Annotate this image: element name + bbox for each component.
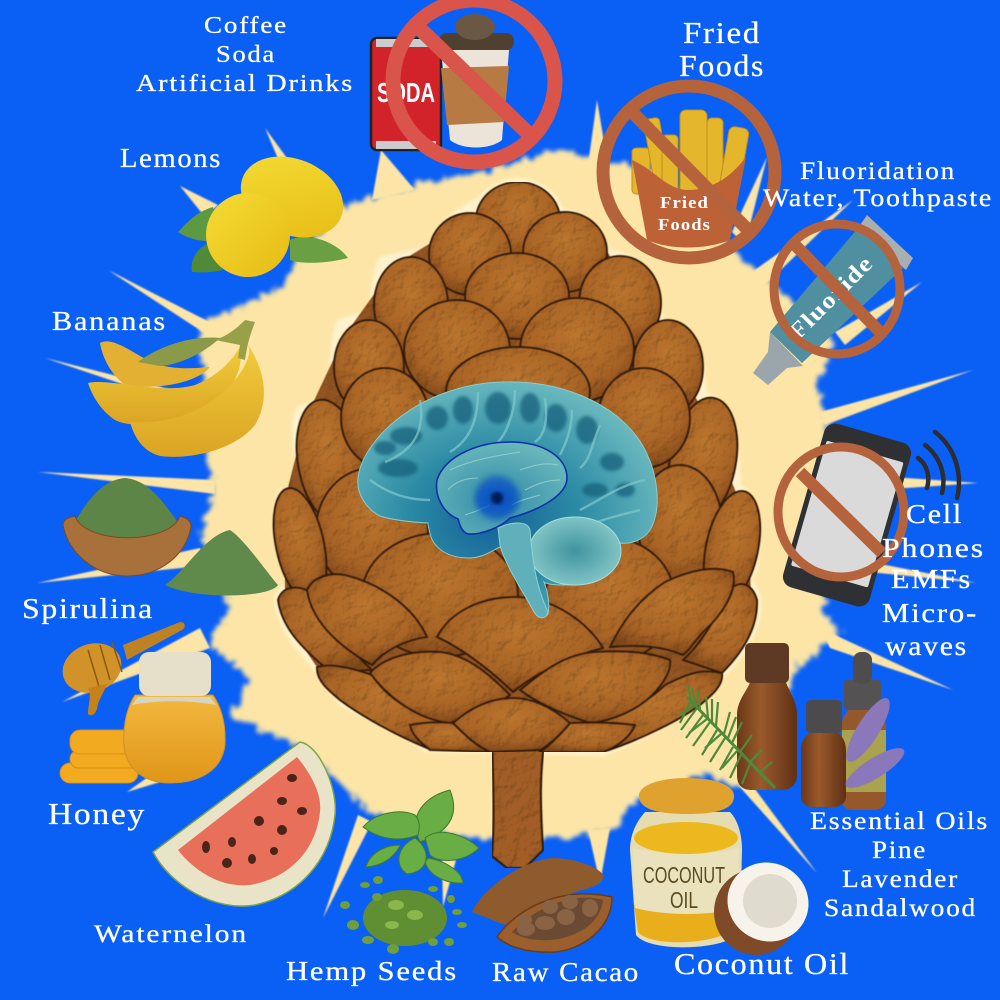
label: fluoridation <box>763 158 993 212</box>
label: fluoridation: Water, Toothpaste <box>763 185 993 212</box>
honey jar <box>124 652 225 783</box>
jar body <box>630 812 742 947</box>
jar lid <box>639 778 734 814</box>
sunburst <box>37 100 978 918</box>
icon: soda and coffee, crossed out <box>371 0 555 162</box>
pineal dark spot <box>475 476 519 520</box>
prohibition sign <box>778 447 904 577</box>
jar text: COCONUT <box>643 862 725 888</box>
icon: hemp leaves and seeds <box>340 790 479 954</box>
label: coconut oil: Coconut Oil <box>674 946 850 981</box>
cerebellum <box>529 517 621 585</box>
box label line 2: Foods <box>658 215 711 234</box>
icon: fried foods, crossed out <box>603 86 775 258</box>
back lemon <box>229 142 355 252</box>
phone screen <box>791 441 904 588</box>
label: fried foods: Fried <box>683 15 761 50</box>
icon: watermelon <box>153 742 335 906</box>
dropper collar <box>844 680 881 710</box>
label: essential oils: Sandalwood <box>824 895 977 922</box>
watermelon flesh <box>178 757 320 885</box>
brain folds <box>374 392 635 497</box>
pine sprig <box>679 685 775 788</box>
label: fried foods: Foods <box>679 48 765 83</box>
honey dipper <box>56 622 185 715</box>
label: bananas: Bananas <box>52 306 167 336</box>
brainstem <box>498 523 548 618</box>
label: lemons: Lemons <box>120 143 222 173</box>
cone halo <box>278 182 757 752</box>
dropper bulb <box>853 652 872 684</box>
large bottle <box>737 682 797 790</box>
icon: honey <box>56 622 225 783</box>
prohibition sign <box>393 0 555 162</box>
label: spirulina: Spirulina <box>22 593 154 625</box>
hemp seeds <box>340 876 467 954</box>
tube cap <box>753 332 803 385</box>
watermelon rind <box>153 742 335 906</box>
right bottle <box>842 708 886 810</box>
signal waves <box>918 432 959 498</box>
pine cone <box>264 182 769 868</box>
icon: lemons <box>178 142 355 277</box>
fries <box>632 110 750 200</box>
tube <box>770 228 903 363</box>
cacao beans <box>517 895 598 936</box>
bowl <box>63 516 191 576</box>
prohibition sign <box>603 86 775 258</box>
label: cell phones emfs microwaves: Phones <box>882 533 985 563</box>
right bottle label <box>842 730 886 792</box>
lemon leaves <box>178 207 220 241</box>
label: essential oils: Essential Oils <box>810 808 989 835</box>
banana leaf <box>138 337 220 366</box>
soda can: SODA <box>377 77 435 108</box>
brain gyri lines <box>370 390 645 525</box>
label: essential oils <box>810 808 989 922</box>
powder pile <box>165 530 278 596</box>
large bottle cap <box>745 643 789 683</box>
icon: bananas <box>88 320 264 457</box>
watermelon seeds <box>202 774 307 868</box>
jar oil bottom <box>634 905 738 942</box>
jar text line 2: OIL <box>670 887 698 913</box>
brain outline <box>358 382 657 617</box>
label: essential oils: Pine <box>872 837 927 864</box>
label: coffee soda artificial drinks: Artificial Drinks <box>136 71 354 97</box>
icon: essential oils <box>679 643 909 810</box>
tube crimp <box>858 215 913 270</box>
icon: spirulina bowl and powder <box>63 478 278 596</box>
icon: cell phone, crossed out <box>778 421 959 609</box>
phone body <box>780 421 914 609</box>
label: cell phones emfs microwaves <box>882 499 985 661</box>
tube label: Fluoride <box>784 250 878 345</box>
front lemon <box>206 193 290 277</box>
label: essential oils: Lavender <box>842 866 959 893</box>
label: fluoridation: Fluoridation <box>800 158 956 185</box>
icon: coconut oil jar <box>630 778 823 956</box>
jar label <box>633 848 739 914</box>
coconut half <box>713 848 823 956</box>
lavender <box>839 693 909 794</box>
label: cell phones emfs microwaves: Cell <box>906 499 963 529</box>
label: cell phones emfs microwaves: EMFs <box>891 564 972 594</box>
label: coffee soda artificial drinks <box>136 13 354 97</box>
label: cell phones emfs microwaves: Micro- <box>882 598 978 628</box>
icon: raw cacao <box>472 858 612 952</box>
hemp leaves <box>363 790 479 883</box>
small bottle cap <box>806 700 842 733</box>
coffee cup <box>439 14 514 148</box>
prohibition sign <box>774 224 900 354</box>
banana stem <box>215 320 255 360</box>
small bottle <box>801 732 846 807</box>
limbic fibres <box>448 452 560 515</box>
cone stem <box>492 745 544 868</box>
box label: Fried <box>660 193 709 212</box>
powder heap in bowl <box>73 478 180 540</box>
cone scales <box>264 182 769 752</box>
label: fried foods <box>679 15 765 83</box>
fries box <box>632 157 746 248</box>
burst rays <box>37 100 978 918</box>
icon: fluoride tube, crossed out <box>753 215 913 385</box>
label: coffee soda artificial drinks: Coffee <box>204 13 288 39</box>
coins <box>60 730 140 783</box>
jar oil top <box>634 822 738 854</box>
label: hemp seeds: Hemp Seeds <box>286 956 458 986</box>
burst body <box>200 150 850 840</box>
soda can <box>371 38 441 150</box>
label: watermelon: Waternelon <box>94 921 248 948</box>
label: raw cacao: Raw Cacao <box>492 957 640 987</box>
limbic core <box>437 442 567 534</box>
label: coffee soda artificial drinks: Soda <box>216 42 276 68</box>
label: honey: Honey <box>48 796 146 831</box>
brain <box>358 382 657 618</box>
label: cell phones emfs microwaves: waves <box>885 631 968 661</box>
